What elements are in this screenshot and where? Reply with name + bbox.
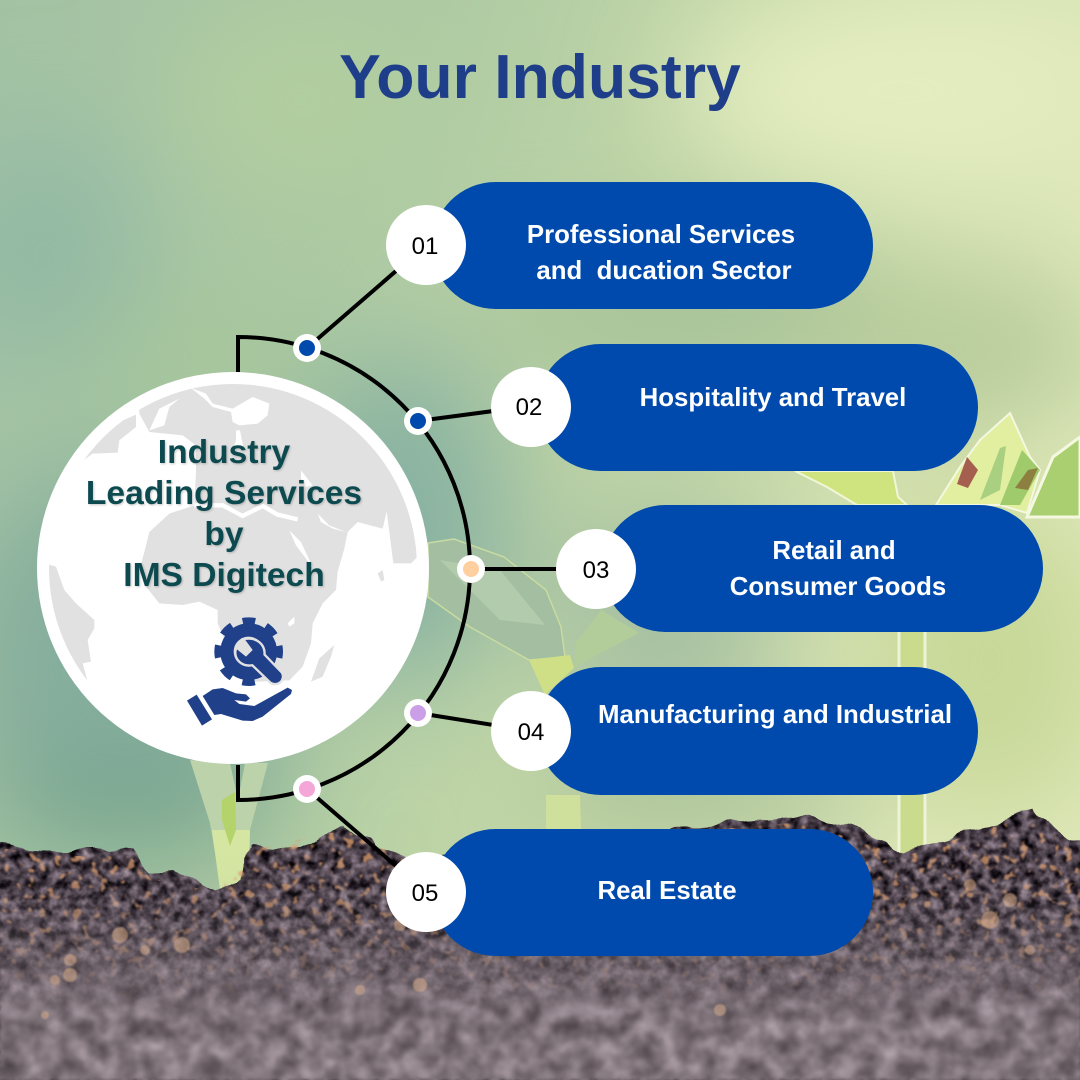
semicircular connector arc — [238, 337, 470, 800]
panel: 03 Retail and Consumer Goods: 03 — [583, 557, 609, 584]
panel: 03 Retail and Consumer Goods: Consumer Goods — [730, 573, 946, 601]
panel: 02 Hospitality and Travel: Hospitality and Travel — [640, 384, 906, 412]
title: Your Industry — [339, 42, 741, 112]
connector node 1 — [293, 334, 321, 362]
globe heading: IMS Digitech — [123, 557, 325, 594]
panel: 05 Real Estate: Real Estate — [597, 877, 737, 905]
panel: 04 Manufacturing and Industrial: 04 — [518, 719, 544, 746]
globe heading: Industry — [158, 434, 291, 471]
panel: 01 Professional Services and Education Sector: 01 — [412, 233, 438, 260]
soil — [0, 808, 1080, 1080]
globe land masses — [49, 384, 416, 682]
panel: 03 Retail and Consumer Goods — [556, 505, 1043, 632]
connector lines — [307, 245, 596, 892]
centre globe — [37, 372, 429, 764]
panel: 05 Real Estate — [386, 829, 873, 956]
panel: 05 Real Estate: 05 — [412, 880, 438, 907]
globe heading — [86, 434, 362, 594]
globe heading: by — [204, 516, 244, 553]
seedling centre with leaves — [428, 539, 639, 830]
connector node 2 — [404, 407, 432, 435]
icon: hand holding gear and wrench — [187, 621, 292, 726]
connector node 4 — [404, 699, 432, 727]
panel: 04 Manufacturing and Industrial: Manufacturing and Industrial — [598, 701, 952, 729]
globe heading: Leading Services — [86, 475, 362, 512]
panel: 01 Professional Services and Education Sector — [386, 182, 873, 309]
panel: 03 Retail and Consumer Goods: Retail and — [772, 537, 896, 565]
connector node 3 — [457, 555, 485, 583]
panel: 01 Professional Services and Education Sector: Professional Services — [527, 221, 795, 249]
seedling right with flower buds — [795, 413, 1080, 856]
panel: 01 Professional Services and Education Sector: and ducation Sector — [536, 257, 792, 285]
panel: 02 Hospitality and Travel: 02 — [516, 394, 542, 421]
panel: 04 Manufacturing and Industrial — [491, 667, 978, 795]
connector node 5 — [293, 775, 321, 803]
seedling left — [190, 760, 268, 905]
panel: 02 Hospitality and Travel — [491, 344, 978, 471]
